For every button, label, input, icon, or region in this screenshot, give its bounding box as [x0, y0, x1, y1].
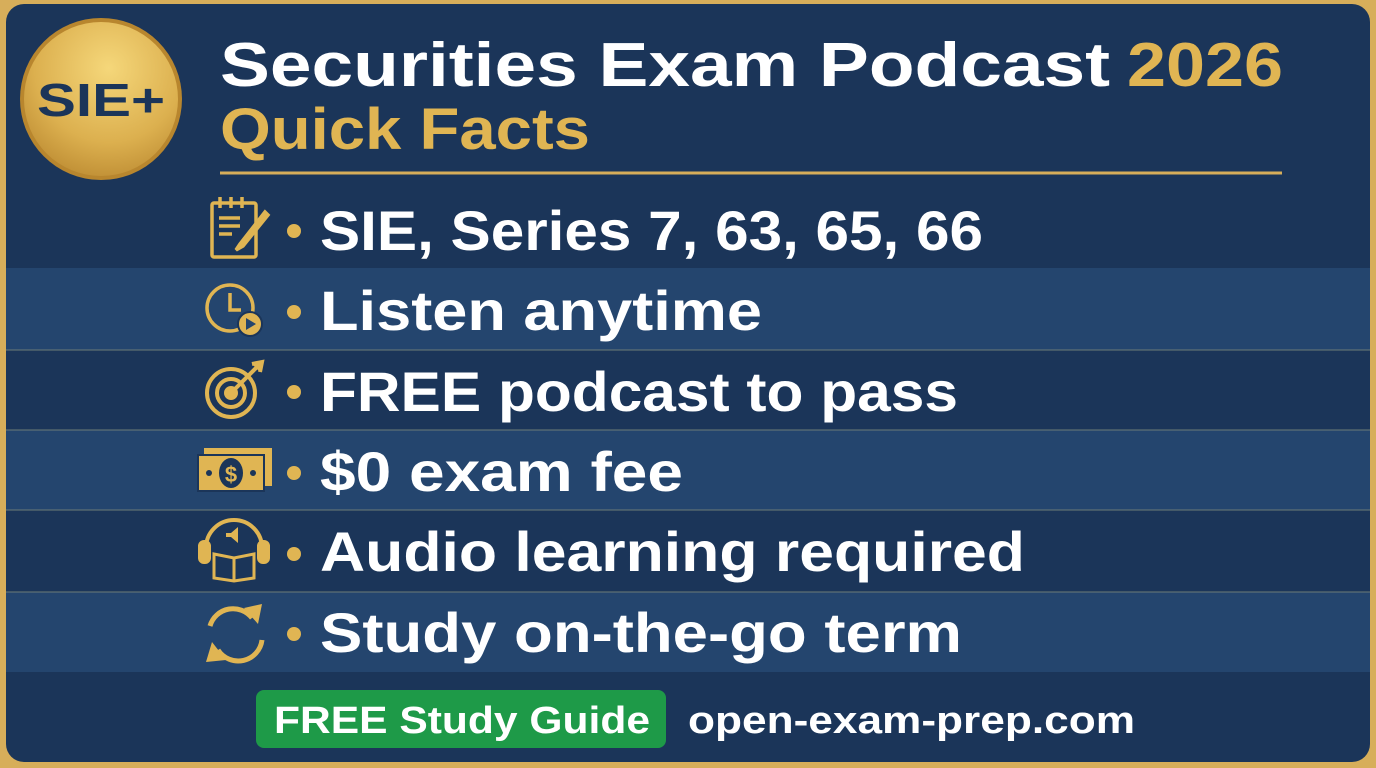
- icon: clock play: [207, 285, 262, 336]
- icon: refresh arrows: [206, 604, 262, 662]
- footer button: [256, 690, 666, 748]
- logo coin: SIE+: [37, 74, 165, 126]
- fact 1: SIE, Series 7, 63, 65, 66: [320, 199, 983, 262]
- icon: headphones book: [200, 520, 268, 581]
- logo coin: [20, 18, 182, 180]
- fact 3: FREE podcast to pass: [320, 360, 958, 423]
- fact 6: Study on-the-go term: [320, 601, 962, 664]
- fact 2: Listen anytime: [320, 279, 762, 342]
- title: Securities Exam Podcast: [220, 31, 1110, 100]
- fact 4: [198, 440, 683, 503]
- title: 2026: [1127, 31, 1283, 100]
- footer button: FREE Study Guide: [274, 700, 650, 742]
- icon: money stack: [198, 448, 272, 491]
- subtitle: Quick Facts: [220, 97, 590, 162]
- icon: target: [207, 362, 262, 417]
- footer url: open-exam-prep.com: [688, 700, 1135, 742]
- fact 4: $0 exam fee: [320, 440, 683, 503]
- rows backgrounds: [6, 268, 1370, 672]
- fact 5: Audio learning required: [320, 520, 1025, 583]
- icon: money stack: $: [225, 462, 237, 487]
- title: [220, 31, 1283, 100]
- icon: notepad: [212, 197, 268, 257]
